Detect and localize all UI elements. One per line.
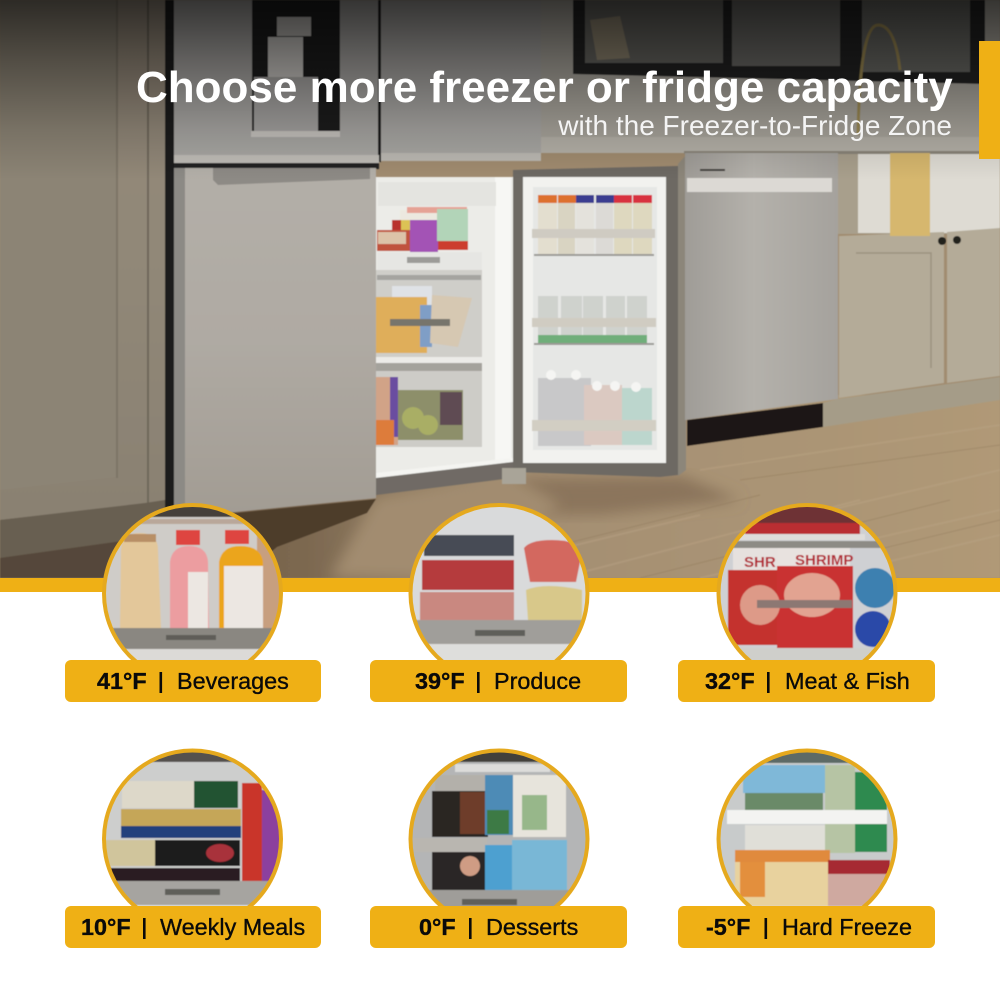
circle photo: beverages bbox=[102, 503, 283, 660]
counter trim over appliances bbox=[684, 151, 1000, 154]
label bar bbox=[678, 906, 935, 948]
label bar: Desserts bbox=[486, 914, 578, 940]
subtitle: with the Freezer-to-Fridge Zone bbox=[557, 110, 952, 141]
panel: 10°F weekly meals bbox=[65, 745, 321, 948]
label bar: 41°F bbox=[97, 668, 147, 694]
label bar: Hard Freeze bbox=[782, 914, 912, 940]
top shelf food bbox=[377, 207, 468, 252]
middle shelf cartons bbox=[532, 296, 656, 345]
title: Choose more freezer or fridge capacity bbox=[136, 63, 953, 112]
label bar: Beverages bbox=[177, 668, 289, 694]
open freezer interior bbox=[376, 177, 513, 495]
bottom drawer bbox=[376, 371, 482, 447]
panel: 41°F beverages bbox=[65, 500, 321, 702]
label bar bbox=[65, 660, 321, 702]
label bar: 39°F bbox=[415, 668, 465, 694]
water dispenser bbox=[251, 0, 340, 137]
upper refrigerator doors and dispenser bbox=[174, 0, 541, 163]
circle photo: meat and fish: SHRIMP bbox=[795, 552, 853, 569]
label bar bbox=[370, 906, 627, 948]
label bar bbox=[370, 660, 627, 702]
drawer divider rail bbox=[375, 362, 482, 372]
counter, backsplash and upper cabinets bbox=[541, 0, 1000, 153]
circle photo: meat and fish: SHR bbox=[744, 554, 776, 571]
circle photo: hard freeze bbox=[716, 748, 898, 906]
label bar: -5°F bbox=[706, 914, 750, 940]
label bar: Meat & Fish bbox=[785, 668, 910, 694]
circle photo: weekly meals bbox=[102, 748, 283, 906]
lower freezer door bbox=[174, 163, 379, 520]
circle photo: desserts bbox=[408, 748, 590, 906]
panel: 0°F desserts bbox=[370, 745, 627, 948]
label bar: 10°F bbox=[81, 914, 131, 940]
yellow divider band bbox=[0, 578, 1000, 592]
dishwasher bbox=[685, 153, 838, 446]
bottom shelf pouches bbox=[532, 370, 656, 446]
panel: 32°F meat and fish bbox=[678, 500, 935, 702]
label bar: 32°F bbox=[705, 668, 755, 694]
dark shade at top of photo bbox=[0, 0, 1000, 180]
base cabinets and sink bbox=[823, 153, 1000, 427]
hinge bbox=[502, 468, 526, 484]
middle drawer bbox=[376, 270, 482, 357]
floor bbox=[232, 400, 1000, 578]
open door with bottle shelves bbox=[502, 155, 686, 484]
label bar bbox=[65, 906, 321, 948]
circle photo: produce bbox=[408, 503, 590, 660]
yellow tab top right bbox=[979, 41, 1000, 159]
circle photo: meat and fish bbox=[716, 503, 898, 660]
panel: 39°F produce bbox=[370, 500, 627, 702]
top shelf bottles bbox=[532, 195, 655, 256]
background photo: kitchen with open refrigerator bbox=[0, 0, 1000, 578]
panel: -5°F hard freeze bbox=[678, 745, 935, 948]
label bar: Weekly Meals bbox=[160, 914, 305, 940]
label bar: Produce bbox=[494, 668, 581, 694]
easy access shelf front bbox=[406, 256, 441, 264]
label bar bbox=[678, 660, 935, 702]
left cabinet wall bbox=[0, 0, 174, 578]
label bar: 0°F bbox=[419, 914, 456, 940]
